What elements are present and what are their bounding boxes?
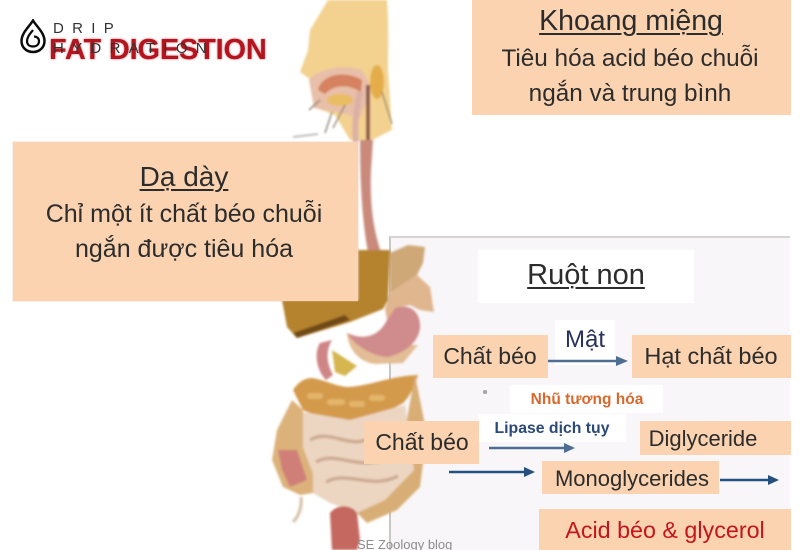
arrow: fat to droplets (548, 356, 628, 366)
arrow: to fatty acids (720, 475, 779, 485)
box: fatty acids and glycerol: Acid béo & glycerol (565, 517, 765, 543)
heading: stomach: Dạ dày (140, 161, 228, 192)
box: monoglycerides: Monoglycerides (555, 466, 709, 491)
arrow: lipase (489, 443, 575, 453)
descending colon (357, 375, 424, 523)
box: fat 2: Chất béo (375, 429, 469, 455)
label: emulsification (510, 385, 663, 413)
heading: small intestine: Ruột non (527, 259, 645, 291)
label: pancreatic lipase (478, 414, 626, 442)
heading: mouth: Khoang miệng (539, 5, 723, 37)
logo text: DRIP (53, 20, 122, 37)
panel: mouth (472, 0, 791, 115)
label: emulsification: Nhũ tương hóa (531, 391, 643, 408)
heading: small intestine (478, 250, 694, 303)
icon: water drop (20, 19, 46, 54)
text: mouth description: ngắn và trung bình (529, 80, 731, 106)
rectum (330, 506, 360, 550)
small intestine (303, 405, 414, 513)
label: bile: Mật (565, 326, 605, 353)
ascending colon (272, 400, 313, 495)
panel: small intestine background (389, 236, 790, 550)
pancreas (332, 350, 357, 376)
arrow: to monoglycerides (449, 467, 535, 477)
box: fat 1: Chất béo (443, 343, 537, 369)
box: diglyceride (640, 421, 791, 455)
stomach (347, 333, 418, 364)
appendix (293, 497, 301, 522)
text: mouth description: Tiêu hóa acid béo chuỗi (501, 45, 759, 72)
text: stomach description (46, 200, 322, 263)
logo text (53, 20, 215, 57)
cecum (278, 450, 307, 487)
box: fat droplets: Hạt chất béo (644, 343, 778, 369)
duodenum (317, 340, 333, 380)
transverse colon (293, 375, 418, 420)
box: fat 1 (433, 335, 548, 378)
mouth cavity (309, 67, 372, 118)
box: monoglycerides (542, 461, 719, 494)
esophagus (360, 140, 381, 252)
box: diglyceride: Diglyceride (649, 426, 757, 451)
text: stomach description: ngắn được tiêu hóa (75, 235, 293, 263)
dot (483, 390, 487, 394)
liver (282, 250, 390, 338)
logo text: HYDRATION (53, 40, 215, 57)
panel: stomach (13, 142, 358, 301)
text: stomach description: Chỉ một ít chất béo chuỗi (46, 200, 322, 228)
box: fatty acids and glycerol (539, 509, 791, 550)
text: mouth description (501, 44, 759, 106)
head (300, 0, 392, 140)
label: bile (555, 320, 615, 365)
logo: Drip Hydration overlapped with heading (20, 19, 267, 66)
label: pancreatic lipase: Lipase dịch tụy (494, 420, 610, 437)
heading: FAT DIGESTION (49, 34, 267, 66)
box: fat droplets (632, 335, 791, 378)
box: fat 2 (364, 421, 479, 464)
